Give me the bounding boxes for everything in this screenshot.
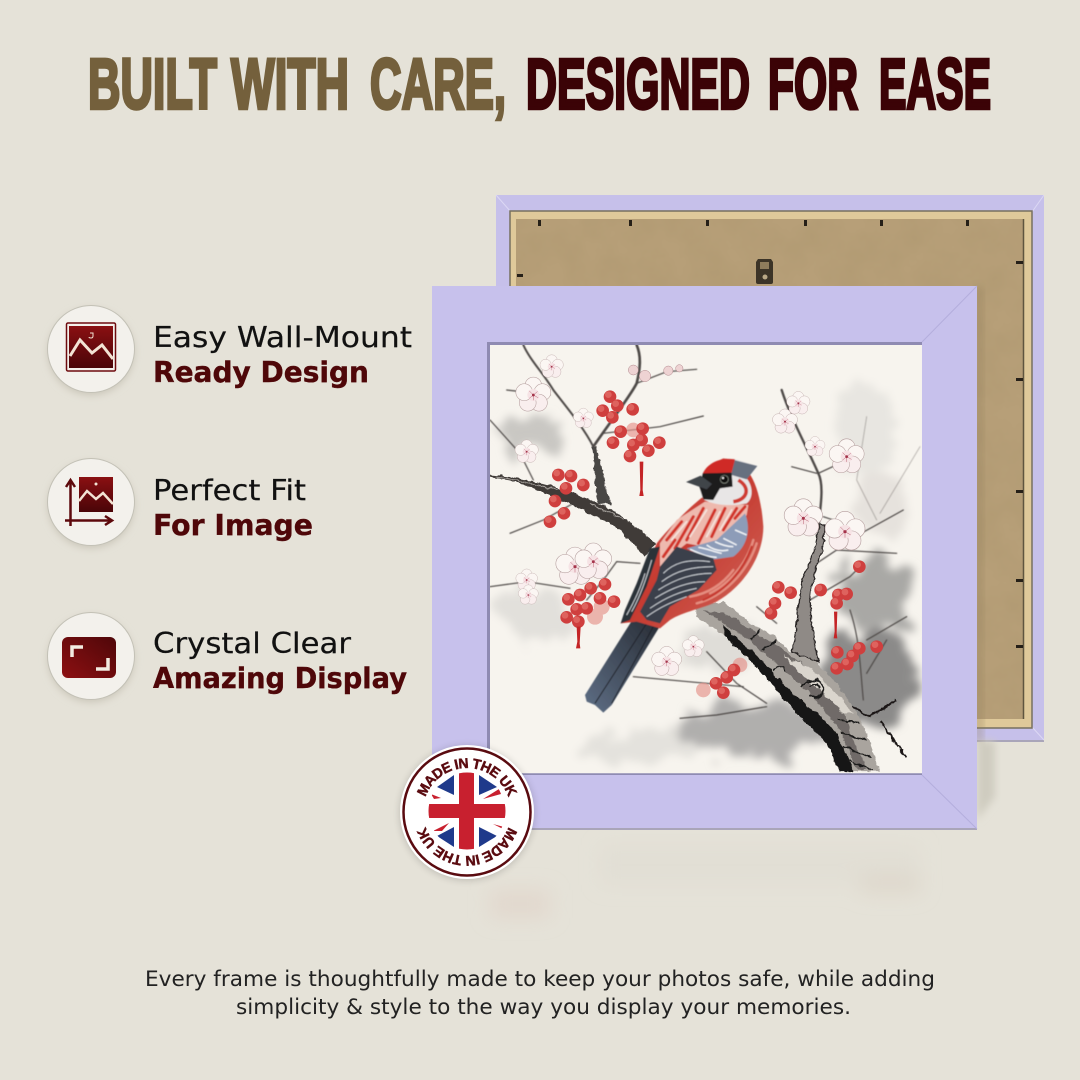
cheek collar (733, 480, 746, 502)
sawtooth hanger (756, 259, 773, 284)
beak (686, 476, 712, 489)
blossoms (515, 355, 865, 675)
berries (544, 390, 883, 699)
dark wing (640, 547, 717, 623)
inner rebate shadow (487, 342, 922, 775)
buds (628, 365, 683, 382)
text: easy wall-mount ready design: Easy Wall-Mount (153, 321, 412, 354)
title: DESIGNED (526, 46, 750, 124)
left bough (490, 474, 655, 557)
text: crystal clear amazing display: Crystal Clear (153, 627, 351, 660)
caption: simplicity & style to the way you display your memories. (236, 995, 851, 1020)
frame reflection on the surface (490, 845, 920, 918)
grey nape (732, 459, 757, 479)
main branches (490, 447, 907, 772)
tail (585, 618, 662, 713)
paint drips (576, 462, 837, 648)
paper (490, 345, 922, 773)
icon: framed mountain picture with hook (48, 306, 134, 395)
black mask (699, 473, 733, 500)
title: FOR (768, 46, 858, 124)
retaining clips (517, 220, 1023, 648)
wooden inner rim (510, 211, 1032, 728)
title: EASE (879, 46, 991, 124)
feature: easy wall-mount (48, 306, 412, 395)
badge text: MADE IN THE UK (416, 826, 518, 866)
frame back view (496, 195, 1044, 742)
twigs (490, 345, 920, 718)
lilac moulding (432, 286, 977, 829)
badge text (416, 758, 518, 866)
title: CARE, (370, 46, 506, 124)
text: perfect fit for image: Perfect Fit (153, 474, 306, 507)
icon: rounded screen with corner brackets (48, 612, 134, 702)
flank streaks (690, 540, 757, 603)
berry washes (587, 423, 747, 697)
red cap (703, 459, 735, 476)
body (621, 458, 763, 628)
right upright bough (792, 525, 825, 662)
kraft backing board (516, 219, 1024, 719)
title: WITH (231, 46, 349, 124)
front frame (432, 286, 977, 830)
feature: crystal clear (48, 612, 407, 702)
painting: bird on blossom branch (490, 345, 922, 773)
badge disc (400, 746, 534, 880)
union flag (428, 772, 506, 850)
icon: image with dimension arrows (48, 458, 134, 548)
ink wash (497, 383, 917, 763)
pale blue upper wing (687, 513, 748, 560)
head (700, 459, 757, 505)
text: perfect fit for image: For Image (153, 509, 313, 542)
title (88, 46, 991, 124)
bird (585, 458, 763, 713)
text: crystal clear amazing display: Amazing Display (153, 662, 407, 695)
badge ring (404, 748, 530, 876)
text: crystal clear amazing display (153, 627, 407, 695)
badge text: MADE IN THE UK (416, 758, 518, 798)
caption: Every frame is thoughtfully made to keep your photos safe, while adding (145, 967, 935, 992)
breast streaks (660, 502, 757, 603)
badge: made in the uk (396, 743, 538, 884)
text: easy wall-mount ready design: Ready Design (153, 356, 369, 389)
text: perfect fit for image (153, 474, 313, 542)
title: BUILT (88, 46, 217, 124)
text: easy wall-mount ready design (153, 321, 412, 389)
back frame moulding (496, 195, 1044, 741)
feature: perfect fit (48, 458, 313, 548)
eye (720, 475, 728, 483)
caption (145, 967, 935, 1020)
front frame shadow (977, 741, 995, 820)
trunk (697, 602, 880, 772)
